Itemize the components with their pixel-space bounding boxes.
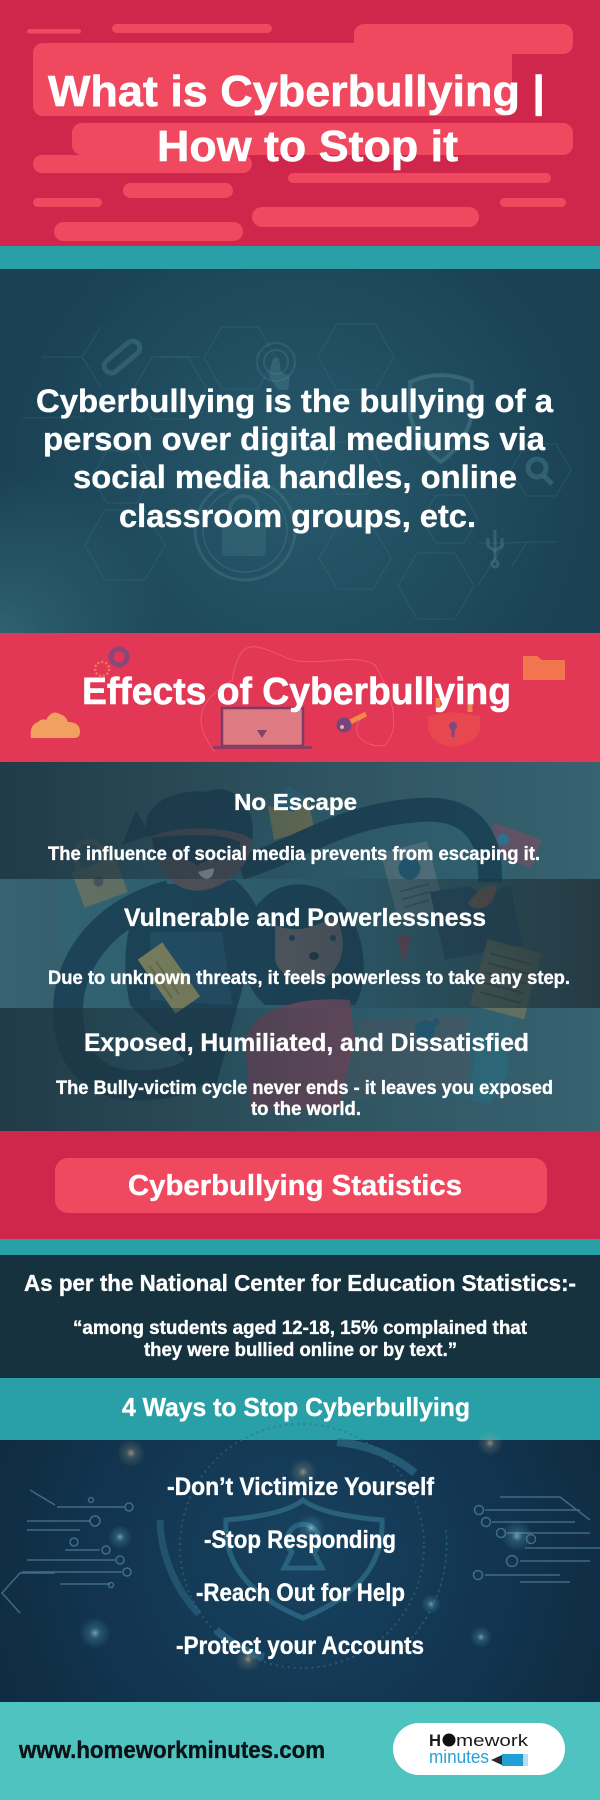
heading: 4 ways: 4 Ways to Stop Cyberbullying (122, 1392, 470, 1422)
icon: laptop (213, 708, 312, 749)
ways list text: -Stop Responding (204, 1526, 396, 1554)
item: no escape: No Escape (234, 789, 357, 815)
teal divider band (0, 1239, 600, 1255)
item: exposed, humiliated, dissatisfied: Exposed, Humiliated, and Dissatisfied (84, 1029, 529, 1057)
definition text: person over digital mediums via (43, 421, 545, 457)
red id note (484, 823, 542, 868)
hand (468, 885, 496, 908)
icon: cloud (31, 712, 80, 738)
shield with keyhole (226, 1500, 382, 1618)
statistics pill (55, 1158, 547, 1213)
teal divider band (0, 246, 600, 269)
title: What is Cyberbullying | (48, 67, 545, 117)
website url: www.homeworkminutes.com (18, 1737, 325, 1764)
circuit traces: right (474, 1497, 600, 1582)
ways list text: -Don’t Victimize Yourself (167, 1473, 435, 1501)
folder (430, 885, 523, 960)
item: no escape: The influence of social media prevents from escaping it. (48, 844, 540, 865)
yellow note (138, 942, 200, 1014)
title (48, 67, 545, 171)
decorative pill cluster (27, 24, 573, 241)
definition text (36, 383, 553, 534)
mouth (198, 868, 214, 879)
logo badge: minutes (429, 1747, 489, 1767)
definition text: classroom groups, etc. (119, 498, 476, 534)
item: vulnerable and powerlessness: Due to unknown threats, it feels powerless to take any step. (48, 968, 570, 989)
quote (73, 1317, 527, 1361)
laptop (340, 1015, 470, 1100)
ways list text: -Protect your Accounts (176, 1632, 424, 1660)
logo badge (393, 1723, 565, 1775)
icon: shield (410, 375, 472, 462)
icon: folder (523, 656, 565, 680)
arm loop (240, 810, 490, 882)
overlay: first band (0, 762, 600, 879)
overlay: second band (0, 879, 600, 1008)
panel: effects heading (0, 633, 600, 762)
illustration: bully and victim (59, 786, 542, 1110)
logo badge: mework (456, 1731, 529, 1750)
source line: As per the National Center for Education Statistics:- (24, 1270, 576, 1296)
girl face (275, 915, 343, 982)
girl hair (242, 884, 364, 1005)
bandana tail (122, 810, 150, 845)
curved line doodle (201, 647, 394, 752)
icon: padlock shield (428, 698, 480, 747)
item: exposed, humiliated, dissatisfied (56, 1029, 553, 1120)
panel: definition (0, 269, 600, 633)
id card (381, 841, 445, 921)
icon: touch target (257, 343, 295, 390)
icon: padlock in rings (195, 480, 295, 580)
quote: they were bullied online or by text.” (144, 1339, 457, 1361)
icon: magnifier (528, 459, 552, 484)
item: no escape (48, 789, 540, 865)
man face (150, 823, 252, 891)
shirt panel (150, 932, 232, 1005)
man hair (146, 789, 253, 840)
glow lights (79, 1430, 533, 1672)
title: How to Stop it (157, 122, 458, 171)
item: vulnerable and powerlessness: Vulnerable and Powerlessness (124, 904, 486, 932)
overlay: third band (0, 1008, 600, 1131)
icon: pencil (491, 1754, 528, 1766)
panel: statistics heading (0, 1131, 600, 1239)
heading: cyberbullying statistics: Cyberbullying Statistics (128, 1170, 462, 1202)
left arm and body sweep (68, 895, 209, 1086)
panel: effects list (0, 762, 600, 1131)
definition text: Cyberbullying is the bullying of a (36, 383, 553, 419)
item: vulnerable and powerlessness (48, 904, 570, 989)
envelope (268, 798, 314, 840)
panel: title header (0, 0, 600, 246)
teal leaf (470, 1040, 508, 1105)
mask (152, 835, 240, 866)
icon: usb (488, 530, 502, 567)
teal blob (59, 807, 515, 1100)
panel: ways heading (0, 1378, 600, 1440)
panel: footer (0, 1702, 600, 1800)
icon: gears (95, 649, 127, 676)
girl torso (245, 999, 355, 1110)
icon: key (336, 714, 366, 732)
item: exposed, humiliated, dissatisfied: to the world. (251, 1099, 361, 1120)
security rings (160, 1424, 447, 1668)
quote: “among students aged 12-18, 15% complained that (73, 1317, 527, 1339)
icon: chain link (101, 338, 143, 376)
item: exposed, humiliated, dissatisfied: The Bully-victim cycle never ends - it leaves you exposed (56, 1078, 553, 1099)
torso (125, 880, 261, 1090)
panel: statistic quote (0, 1255, 600, 1378)
padlock note (63, 834, 128, 908)
ways list text: -Reach Out for Help (196, 1579, 405, 1607)
heading: effects of cyberbullying: Effects of Cyberbullying (82, 671, 511, 713)
logo badge: H (429, 1731, 441, 1750)
definition text: social media handles, online (73, 459, 517, 495)
circuit traces: left (2, 1490, 133, 1613)
ways list text (167, 1473, 435, 1660)
background hexagon network (23, 324, 571, 619)
text note (470, 939, 542, 1019)
warning mark (397, 935, 411, 965)
panel: ways list (0, 1424, 600, 1702)
